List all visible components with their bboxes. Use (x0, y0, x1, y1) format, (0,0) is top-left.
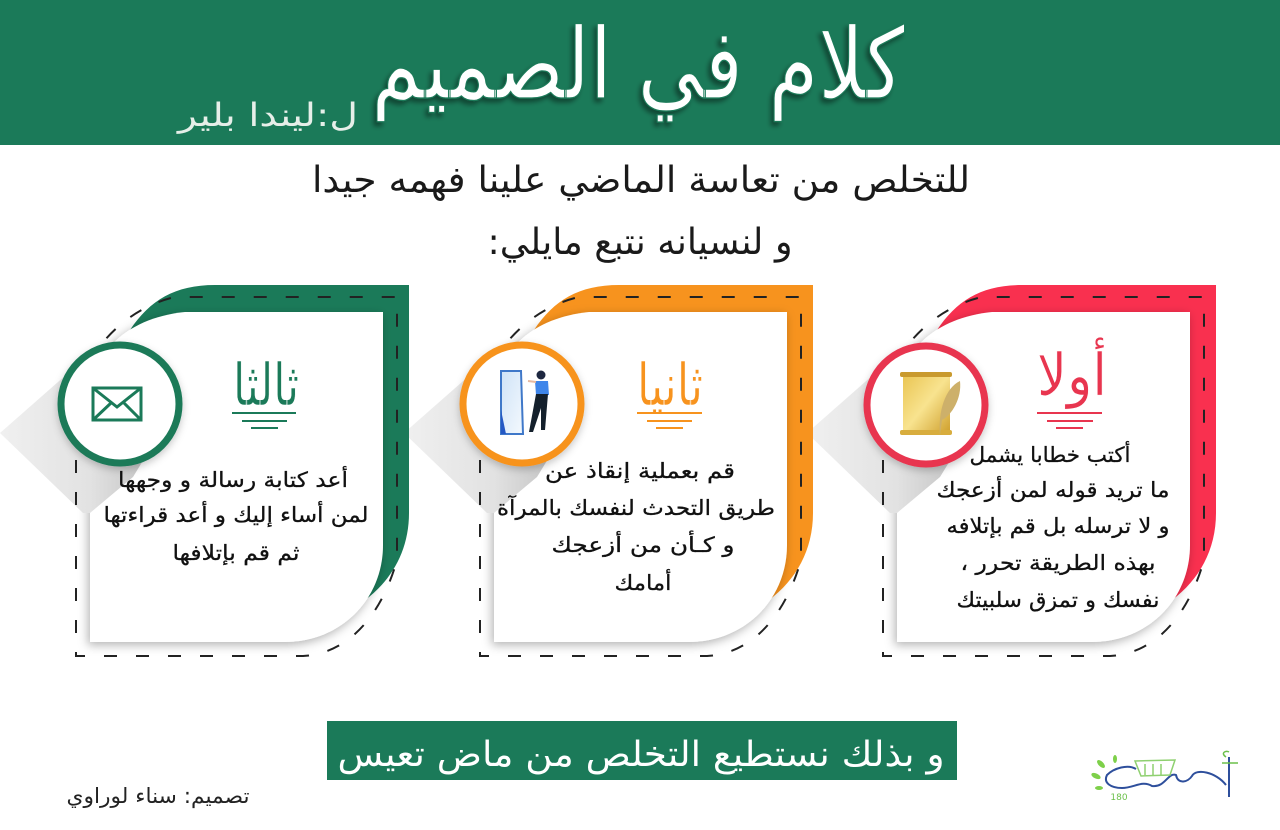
text: second step body: و كـأن من أزعجك (552, 530, 734, 557)
author credit: ل:ليندا بلير (176, 96, 358, 134)
text: third step body: أعد كتابة رسالة و وجهها (118, 466, 348, 492)
text: first step body: ما تريد قوله لمن أزعجك (936, 476, 1170, 502)
text: second step body: أمامك (614, 569, 672, 595)
text: first step body: أكتب خطابا يشمل (970, 441, 1130, 467)
text: first step body: و لا ترسله بل قم بإتلافه (946, 514, 1170, 539)
heading: first: أولا (1037, 337, 1107, 410)
icon: scroll and quill in circle (867, 346, 985, 464)
logo (1090, 751, 1238, 803)
text: third step body (104, 466, 368, 566)
text: first step body: بهذه الطريقة تحرر ، (960, 551, 1156, 575)
designer credit: تصميم: سناء لوراوي (66, 784, 250, 809)
text: third step body: ثم قم بإتلافها (172, 541, 300, 566)
heading: first (1037, 337, 1107, 428)
conclusion banner: و بذلك نستطيع التخلص من ماض تعيس (338, 735, 944, 775)
text: third step body: لمن أساء إليك و أعد قراءتها (104, 501, 368, 528)
icon: envelope in circle (61, 345, 179, 463)
panel: first step (807, 285, 1216, 656)
text: second step body: طريق التحدث لنفسك بالمرآة (497, 495, 775, 520)
conclusion banner (327, 721, 957, 780)
title: كلام في الصميم (372, 8, 905, 122)
heading: third: ثالثا (233, 351, 299, 419)
text: first step body (936, 441, 1170, 612)
panel: second step (404, 285, 813, 656)
logo: 180 (1110, 793, 1128, 803)
intro text line 2: و لنسيانه نتبع مايلي: (488, 222, 792, 263)
icon: person at mirror in circle (463, 345, 581, 463)
heading: second: ثانيا (637, 351, 703, 419)
header banner (0, 0, 1280, 145)
heading: third (232, 351, 299, 428)
panel: third step (0, 285, 409, 656)
intro text line 1: للتخلص من تعاسة الماضي علينا فهمه جيدا (312, 160, 970, 201)
text: first step body: نفسك و تمزق سلبيتك (956, 588, 1160, 612)
text: second step body: قم بعملية إنقاذ عن (545, 459, 735, 484)
text: second step body (497, 459, 775, 595)
